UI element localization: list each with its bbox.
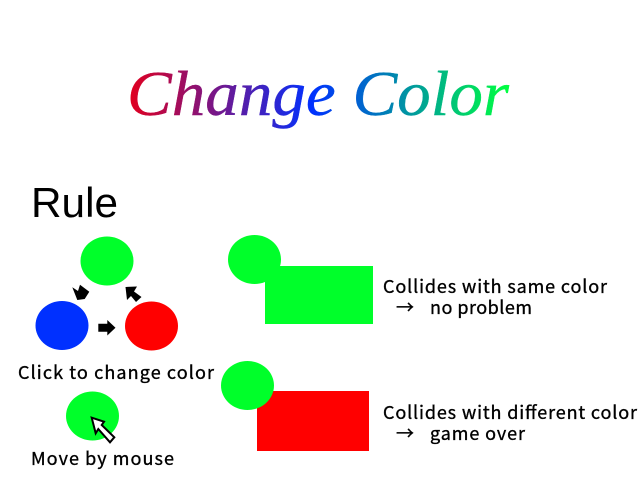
panel: move by mouse (66, 392, 119, 442)
text: different colour rule: → (396, 420, 414, 446)
icon: green player circle (66, 392, 119, 440)
icon: green circle (80, 236, 134, 286)
panel: same colour collision (228, 235, 373, 324)
text: same colour rule: Collides with same color (383, 273, 608, 299)
arrow: green to blue (72, 285, 89, 300)
caption: click to change colour: Click to change color (18, 359, 215, 385)
text: same colour rule: no problem (430, 294, 532, 320)
text: different colour rule: game over (430, 420, 526, 446)
panel: colour cycle (36, 236, 178, 350)
icon: red circle (125, 302, 178, 350)
text: same colour rule: → (396, 294, 414, 320)
text: different colour rule: Collides with different color (383, 399, 638, 425)
green circle (228, 235, 281, 284)
green circle (221, 361, 274, 410)
arrow: red to green (126, 286, 142, 302)
icon: blue circle (36, 301, 88, 350)
panel: different colour collision (221, 361, 369, 451)
text: different colour rule (383, 399, 638, 446)
caption: move by mouse: Move by mouse (31, 445, 174, 471)
arrow: blue to red (98, 320, 116, 336)
icon: mouse cursor (92, 418, 114, 442)
text: same colour rule (383, 273, 608, 320)
title: Change Color (127, 58, 510, 129)
heading: Rule: Rule (31, 179, 118, 226)
green block (265, 266, 373, 324)
red block (257, 391, 369, 451)
